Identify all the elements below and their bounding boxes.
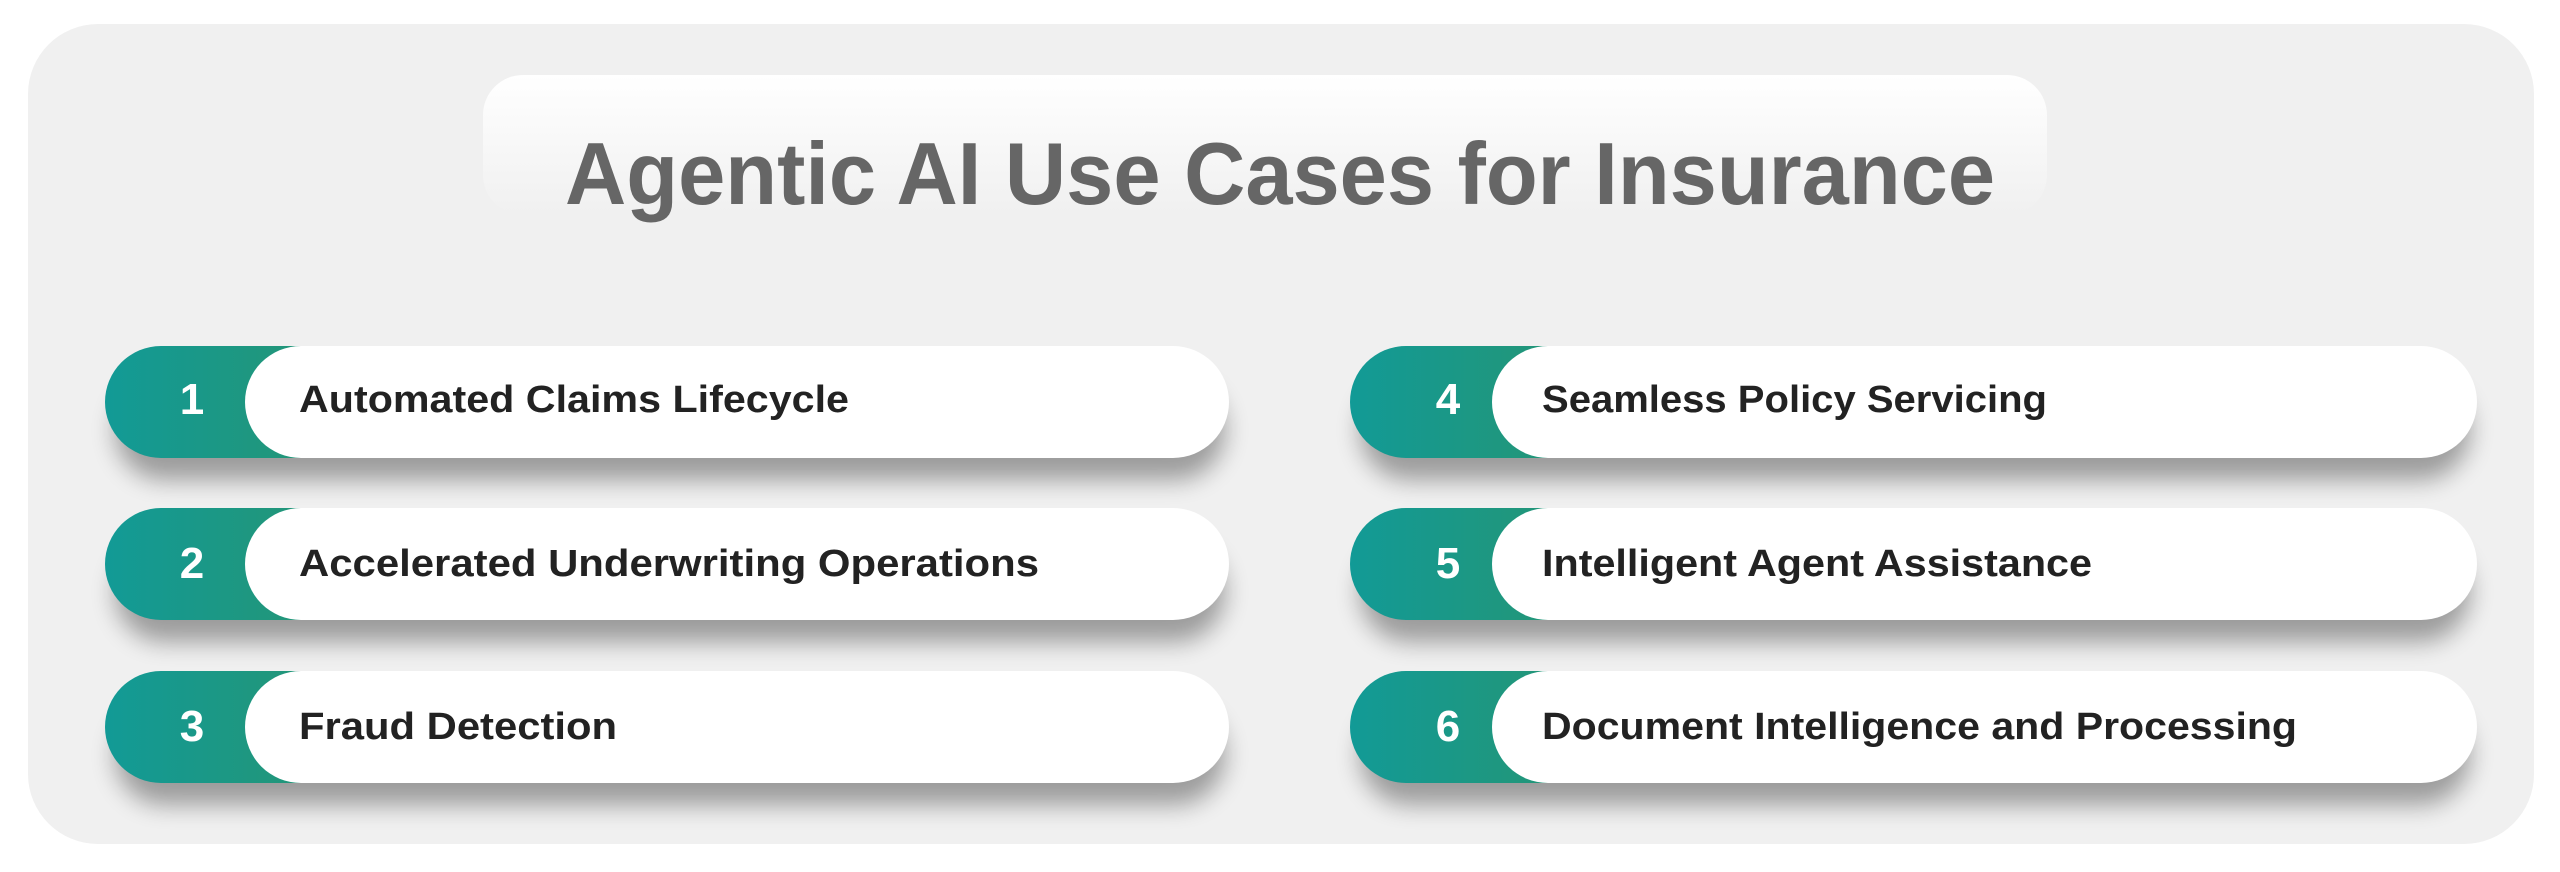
item 3 [105,671,1229,805]
item 6: Document Intelligence and Processing [1542,706,2297,748]
item 4 [1350,346,2477,480]
item 5: 5 [1436,539,1460,588]
title: Agentic AI Use Cases for Insurance [565,124,1995,223]
item 5: Intelligent Agent Assistance [1542,543,2092,585]
item 5 [1350,508,2477,642]
item 4: 4 [1436,375,1461,424]
item 6: 6 [1436,702,1460,751]
item 1: Automated Claims Lifecycle [299,379,849,421]
item 2: 2 [180,539,204,588]
item 3: 3 [180,702,204,751]
item 1 [105,346,1229,480]
item 6 [1350,671,2477,805]
item 2: Accelerated Underwriting Operations [299,543,1039,585]
title box [483,75,2047,223]
item 3: Fraud Detection [299,706,617,748]
item 4: Seamless Policy Servicing [1542,379,2047,421]
item 2 [105,508,1229,642]
item 1: 1 [180,375,204,424]
